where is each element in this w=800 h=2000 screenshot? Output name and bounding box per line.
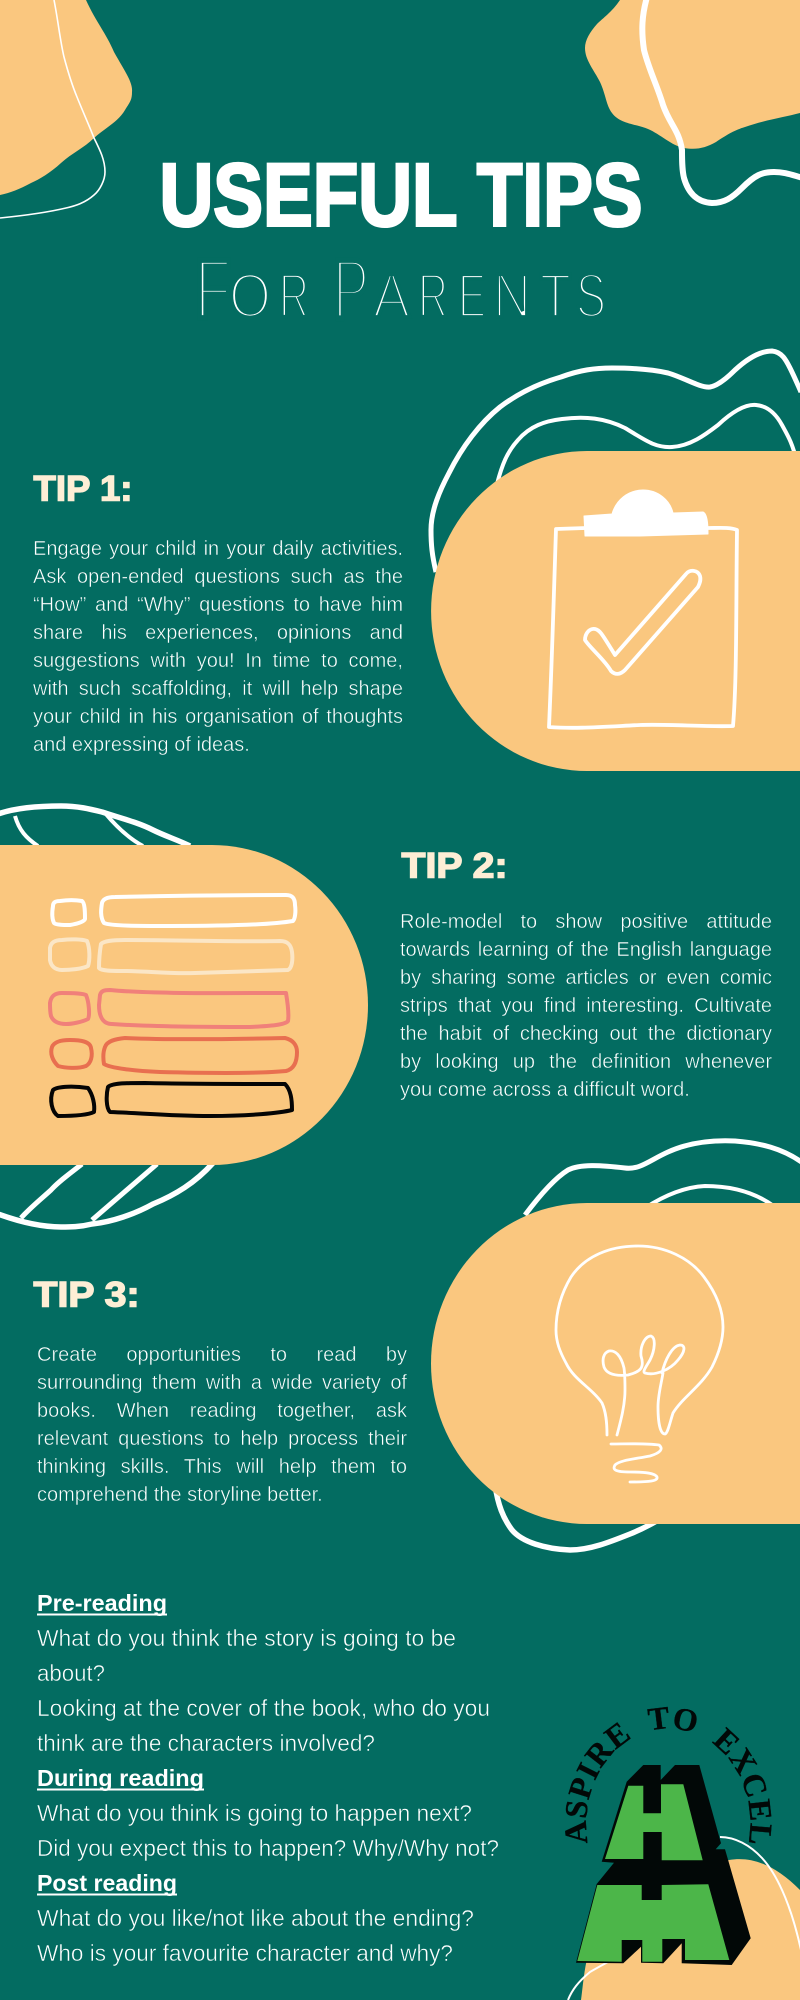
row 2 cream — [50, 939, 292, 973]
row 1 white — [52, 895, 295, 926]
text block: reading questions: What do you like/not like about the ending? — [37, 1905, 474, 1931]
text block: tip 1 body: with such scaffolding, it will help shape — [33, 678, 403, 700]
row 3 pink — [50, 990, 288, 1027]
text block: reading questions: about? — [37, 1660, 105, 1686]
text block: tip 3 body: thinking skills. This will help them to — [37, 1456, 407, 1478]
text block: reading questions: What do you think is going to happen next? — [37, 1800, 472, 1826]
line: top left squiggle — [0, 0, 105, 218]
text block: tip 1 body: “How” and “Why” questions to have him — [33, 594, 403, 616]
heading: useful tips: USEFUL TIPS — [160, 144, 642, 244]
text block: tip 2 body: you come across a difficult word. — [400, 1078, 690, 1100]
pill: tip 3 — [431, 1203, 800, 1524]
heading: for parents: A — [373, 262, 411, 331]
text block: tip 3 body — [37, 1344, 407, 1506]
line: tip 1 outer squiggle — [431, 351, 800, 572]
line: tip 3 outer squiggle — [525, 1141, 800, 1215]
text block: tip 1 body: share his experiences, opinions and — [33, 622, 403, 644]
pill: tip 2 — [0, 845, 368, 1165]
line: top right squiggle — [642, 0, 800, 203]
row 4 orange — [51, 1038, 297, 1073]
text block: tip 2 body: by looking up the definition whenever — [400, 1050, 772, 1072]
text block: tip 3 body: relevant questions to help process their — [37, 1428, 407, 1450]
panel: tip 3 illustration — [431, 1141, 800, 1550]
heading: for parents: S — [576, 262, 606, 331]
line: bottom right squiggle — [568, 1837, 800, 2000]
text block: reading questions: Who is your favourite character and why? — [37, 1940, 453, 1966]
text block: tip 3 body: comprehend the storyline better. — [37, 1484, 323, 1506]
text block: tip 2 body: by sharing some articles or even comic — [400, 966, 772, 988]
text block: tip 2 body — [400, 910, 772, 1100]
row 5 black — [51, 1083, 292, 1116]
blob: top left — [0, 0, 132, 218]
text block: reading questions: think are the characters involved? — [37, 1730, 375, 1756]
icon: hand-drawn checklist — [50, 895, 297, 1116]
subheading: pre-reading: Pre-reading — [37, 1590, 167, 1616]
heading: for parents: P — [333, 242, 369, 336]
panel: tip 1 illustration — [431, 351, 800, 771]
text block: tip 1 body: and expressing of ideas. — [33, 734, 250, 756]
heading: tip 3: TIP 3: — [34, 1276, 140, 1314]
heading: for parents: O — [229, 262, 271, 331]
panel: tip 2 illustration — [0, 806, 368, 1227]
heading: tip 2: TIP 2: — [402, 846, 508, 886]
text block: tip 3 body: surrounding them with a wide variety of — [37, 1372, 407, 1394]
icon: clipboard with check — [549, 490, 737, 728]
logo: aspire to excel — [565, 1706, 772, 1965]
text block: tip 1 body: suggestions with you! In time to come, — [33, 650, 403, 672]
logo upper green shape — [605, 1784, 703, 1860]
text block: tip 1 body: Ask open-ended questions such as the — [33, 566, 403, 588]
logo curved motto: ASPIRE TO EXCEL — [565, 1706, 772, 1844]
title — [160, 144, 642, 336]
text block: tip 2 body: the habit of checking out the dictionary — [400, 1022, 772, 1044]
text block: reading questions: Looking at the cover of the book, who do you — [37, 1695, 490, 1721]
text block: tip 2 body: strips that you find interesting. Cultivate — [400, 994, 772, 1016]
line: tip 1 inner squiggle — [497, 405, 797, 484]
heading: for parents: R — [418, 262, 448, 331]
subheading: post reading: Post reading — [37, 1870, 177, 1896]
line: tip 3 inner arc — [645, 1186, 775, 1208]
subheading: during reading: During reading — [37, 1765, 204, 1791]
text block: tip 1 body — [33, 538, 403, 756]
text block: reading questions: Did you expect this to happen? Why/Why not? — [37, 1835, 499, 1861]
heading: for parents: E — [458, 262, 486, 331]
text block: tip 3 body: Create opportunities to read by — [37, 1344, 407, 1366]
heading: for parents: R — [279, 262, 309, 331]
line: tip 2 circle arcs — [0, 806, 213, 1227]
text block: tip 3 body: books. When reading together, ask — [37, 1400, 407, 1422]
heading: for parents — [195, 242, 606, 336]
logo lower green shape — [577, 1884, 729, 1962]
blob: top right — [585, 0, 800, 203]
heading: tip 1: TIP 1: — [34, 470, 132, 508]
icon: light bulb — [556, 1246, 723, 1482]
logo shadow — [576, 1765, 751, 1965]
text block: tip 2 body: Role-model to show positive attitude — [400, 910, 772, 932]
text block: reading questions — [37, 1590, 499, 1966]
heading: for parents: N — [493, 262, 531, 331]
heading: for parents: F — [195, 242, 231, 336]
blob: bottom right — [581, 1859, 800, 2000]
pill: tip 1 — [431, 451, 800, 771]
text block: tip 1 body: Engage your child in your daily activities. — [33, 538, 403, 560]
text block: tip 1 body: your child in his organisation of thoughts — [33, 706, 403, 728]
text block: tip 2 body: towards learning of the English language — [400, 938, 772, 960]
heading: for parents: T — [540, 262, 571, 331]
line: tip 3 lower squiggle — [495, 1485, 665, 1550]
text block: reading questions: What do you think the story is going to be — [37, 1625, 456, 1651]
